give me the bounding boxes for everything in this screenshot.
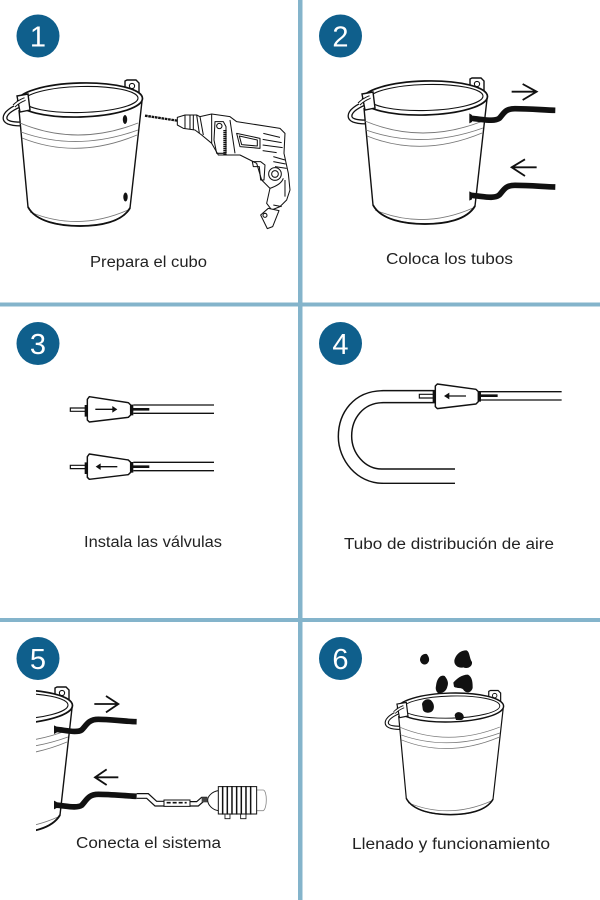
caption 5: Conecta el sistema — [76, 835, 221, 852]
icon: cropped bucket — [36, 686, 74, 832]
valve left arrow — [70, 454, 214, 479]
badge 5: 5 — [30, 644, 46, 676]
panel: step 3 — [16, 322, 222, 551]
icon: tubes, coupling and air pump — [54, 696, 266, 819]
badge 4 — [319, 322, 362, 365]
valve right arrow — [70, 397, 214, 422]
caption 4: Tubo de distribución de aire — [344, 536, 554, 553]
caption 3: Instala las válvulas — [84, 534, 222, 551]
badge 6 — [319, 637, 362, 680]
panel: step 6 — [319, 637, 550, 853]
caption 6: Llenado y funcionamiento — [352, 836, 550, 853]
icon: tubes and arrows — [469, 84, 555, 201]
icon: drill — [145, 114, 290, 229]
badge 1: 1 — [30, 22, 46, 54]
panel: step 4 — [319, 322, 562, 553]
badge 6: 6 — [332, 644, 349, 676]
badge 1 — [16, 14, 60, 58]
badge 2: 2 — [332, 22, 349, 54]
badge 3 — [16, 322, 60, 365]
panel: step 1 — [5, 14, 290, 271]
icon: air distribution tube — [338, 384, 562, 483]
badge 3: 3 — [30, 329, 46, 361]
icon: bucket — [350, 78, 488, 224]
icon: bucket with holes — [5, 80, 143, 226]
badge 2 — [319, 14, 362, 58]
badge 4: 4 — [332, 329, 349, 361]
badge 5 — [16, 637, 60, 680]
panel: step 2 — [319, 14, 555, 268]
icon: valves — [70, 397, 214, 479]
panel: step 5 — [0, 637, 266, 852]
icon: bucket — [387, 690, 504, 815]
caption 2: Coloca los tubos — [386, 251, 513, 268]
icon: falling soil — [420, 650, 473, 720]
caption 1: Prepara el cubo — [90, 254, 207, 271]
